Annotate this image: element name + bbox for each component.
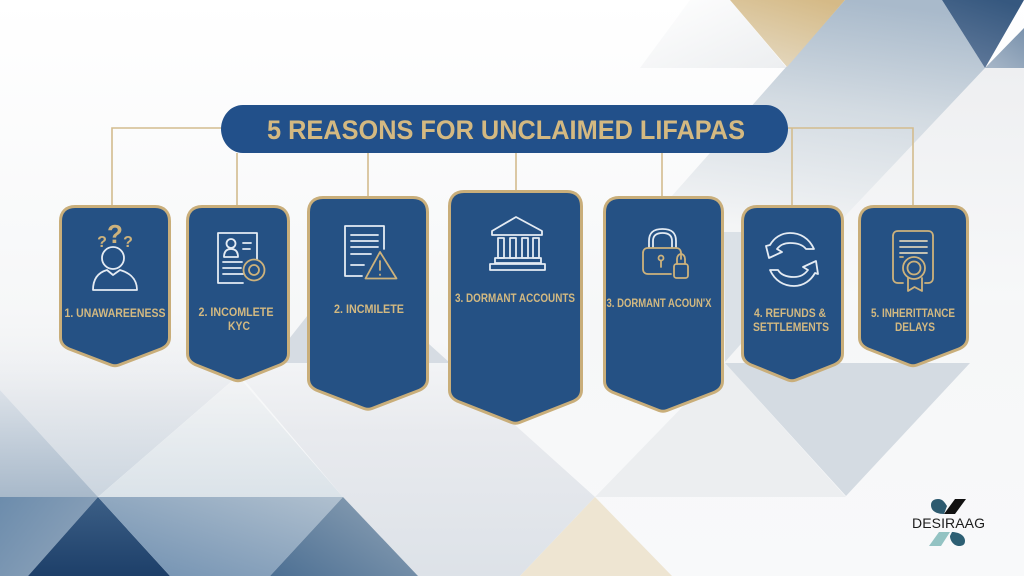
card 1: unawareness xyxy=(60,206,170,366)
title: 5 REASONS FOR UNCLAIMED LIFAPAS xyxy=(267,115,745,145)
label: SETTLEMENTS xyxy=(753,320,829,334)
card 5: dormant account lock xyxy=(604,198,722,411)
label: 2. INCMILETE xyxy=(334,302,404,316)
icon: confused person: ? xyxy=(97,234,107,251)
logo: Desiraag xyxy=(912,499,985,546)
card 4: dormant accounts xyxy=(450,192,582,423)
icon: confused person xyxy=(93,219,137,290)
icon: padlocks xyxy=(643,229,688,278)
label: 5. INHERITTANCE xyxy=(871,306,955,320)
card 6: refunds and settlements xyxy=(742,206,842,381)
label: 3. DORMANT ACCOUNTS xyxy=(455,291,575,305)
label xyxy=(198,305,274,333)
label: 1. UNAWAREENESS xyxy=(64,306,166,320)
label: 2. INCOMLETE xyxy=(198,305,274,319)
connector lines xyxy=(112,128,913,205)
logo: Desiraag: DESIRAAG xyxy=(912,515,985,531)
label: 4. REFUNDS & xyxy=(754,306,826,320)
title banner xyxy=(221,105,788,153)
card 2: incomplete KYC xyxy=(188,206,288,381)
icon: circular arrows xyxy=(766,233,818,286)
icon: bank building xyxy=(490,217,545,270)
label xyxy=(753,306,829,334)
icon: KYC document xyxy=(218,233,264,283)
label: 3. DORMANT ACOUN'X xyxy=(606,296,712,310)
card 7: inheritance delays xyxy=(860,206,968,366)
label: DELAYS xyxy=(895,320,935,334)
label: KYC xyxy=(228,319,250,333)
label xyxy=(871,306,955,334)
icon: certificate with seal xyxy=(893,231,933,291)
icon: confused person: ? xyxy=(123,234,133,251)
icon: document with warning xyxy=(345,226,396,278)
card 3: incomplete xyxy=(308,198,428,409)
icon: confused person: ? xyxy=(107,219,123,249)
